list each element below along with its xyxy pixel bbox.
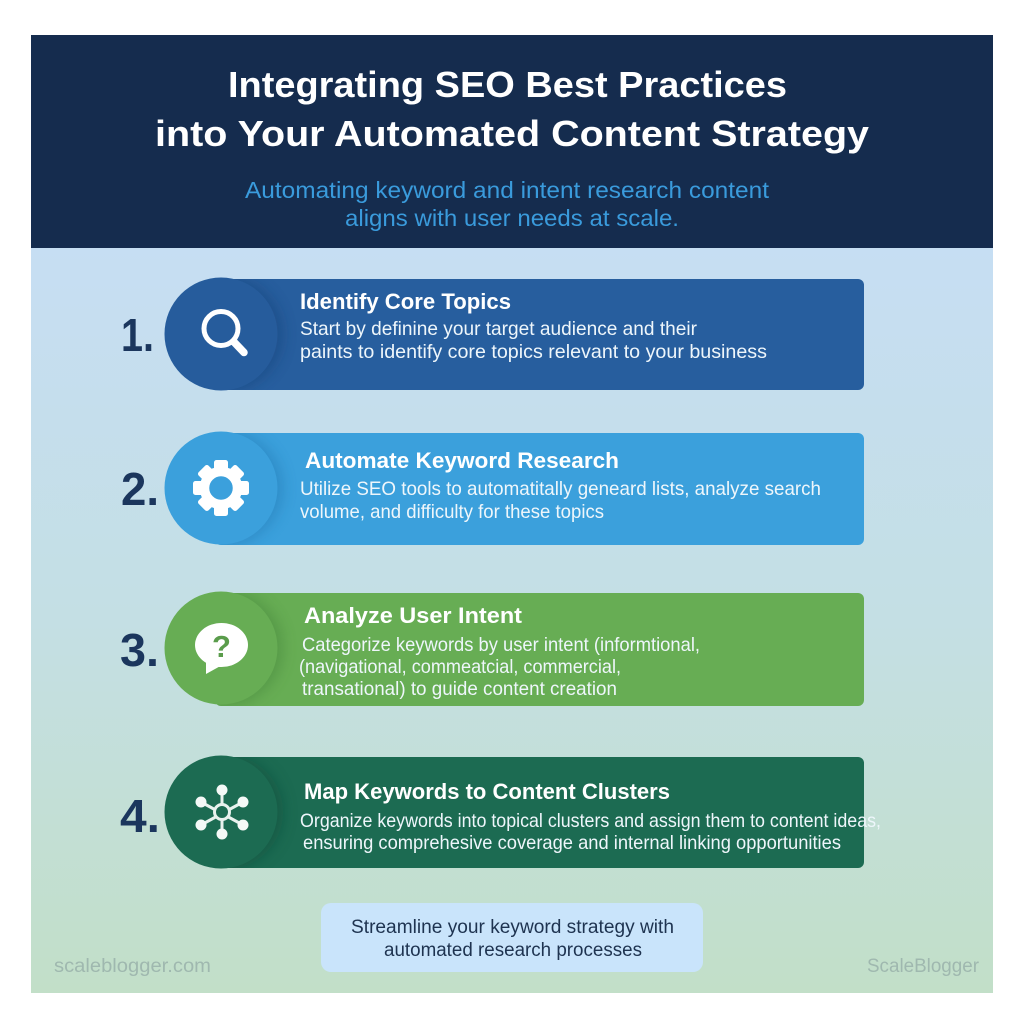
callout: Streamline your keyword strategy with: [351, 917, 674, 938]
number 3: 3.: [120, 624, 159, 676]
header: [31, 35, 993, 248]
title: [155, 64, 869, 154]
title: into Your Automated Content Strategy: [155, 113, 869, 154]
body 1: [300, 318, 767, 363]
heading 3: Analyze User Intent: [304, 603, 523, 628]
icon: network cluster: [196, 784, 248, 840]
background panel: [31, 248, 993, 993]
heading 1: Identify Core Topics: [300, 289, 511, 314]
icon: question speech bubble: ?: [212, 629, 231, 664]
footer right: brand: ScaleBlogger: [867, 956, 980, 977]
number 1: 1.: [121, 309, 154, 361]
body 3: transational) to guide content creation: [302, 678, 617, 700]
body 4: Organize keywords into topical clusters and assign them to content ideas,: [300, 810, 881, 832]
body 3: Categorize keywords by user intent (informtional,: [302, 634, 700, 656]
body 4: [300, 810, 881, 854]
step 2: [121, 431, 864, 545]
body 2: [300, 478, 821, 523]
card 4: [215, 757, 864, 868]
heading 4: Map Keywords to Content Clusters: [304, 779, 670, 804]
card 3: [215, 593, 864, 706]
body 2: Utilize SEO tools to automatitally geneard lists, analyze search: [300, 478, 821, 500]
body 3: (navigational, commeatcial, commercial,: [299, 656, 621, 678]
heading 2: Automate Keyword Research: [305, 448, 619, 473]
card 2: [215, 433, 864, 545]
subtitle: [245, 177, 769, 231]
number 2: 2.: [121, 463, 159, 515]
body 4: ensuring comprehesive coverage and internal linking opportunities: [303, 832, 841, 854]
circle shadow 4: [231, 757, 284, 868]
circle 4: [164, 756, 278, 868]
step 1: [121, 277, 864, 391]
icon: question speech bubble: [195, 623, 248, 674]
body 1: paints to identify core topics relevant to your business: [300, 341, 767, 363]
body 1: Start by definine your target audience and their: [300, 318, 697, 340]
footer left: website: scaleblogger.com: [54, 956, 211, 977]
body 2: volume, and difficulty for these topics: [300, 501, 604, 523]
icon: magnifying glass: [204, 312, 244, 352]
card 1: [215, 279, 864, 390]
subtitle: Automating keyword and intent research content: [245, 177, 769, 203]
callout: [321, 903, 703, 972]
icon: gear: [193, 460, 249, 516]
callout: automated research processes: [384, 940, 642, 961]
step 4: [120, 755, 881, 869]
circle shadow 3: [218, 593, 284, 706]
title: Integrating SEO Best Practices: [228, 64, 787, 105]
circle 3: [164, 592, 278, 704]
body 3: [299, 634, 700, 700]
step 3: [120, 591, 864, 706]
circle 2: [164, 432, 278, 544]
subtitle: aligns with user needs at scale.: [345, 205, 679, 231]
circle shadow 1: [231, 279, 284, 390]
circle shadow 2: [219, 433, 286, 545]
number 4: 4.: [120, 790, 160, 842]
circle 1: [164, 278, 278, 390]
